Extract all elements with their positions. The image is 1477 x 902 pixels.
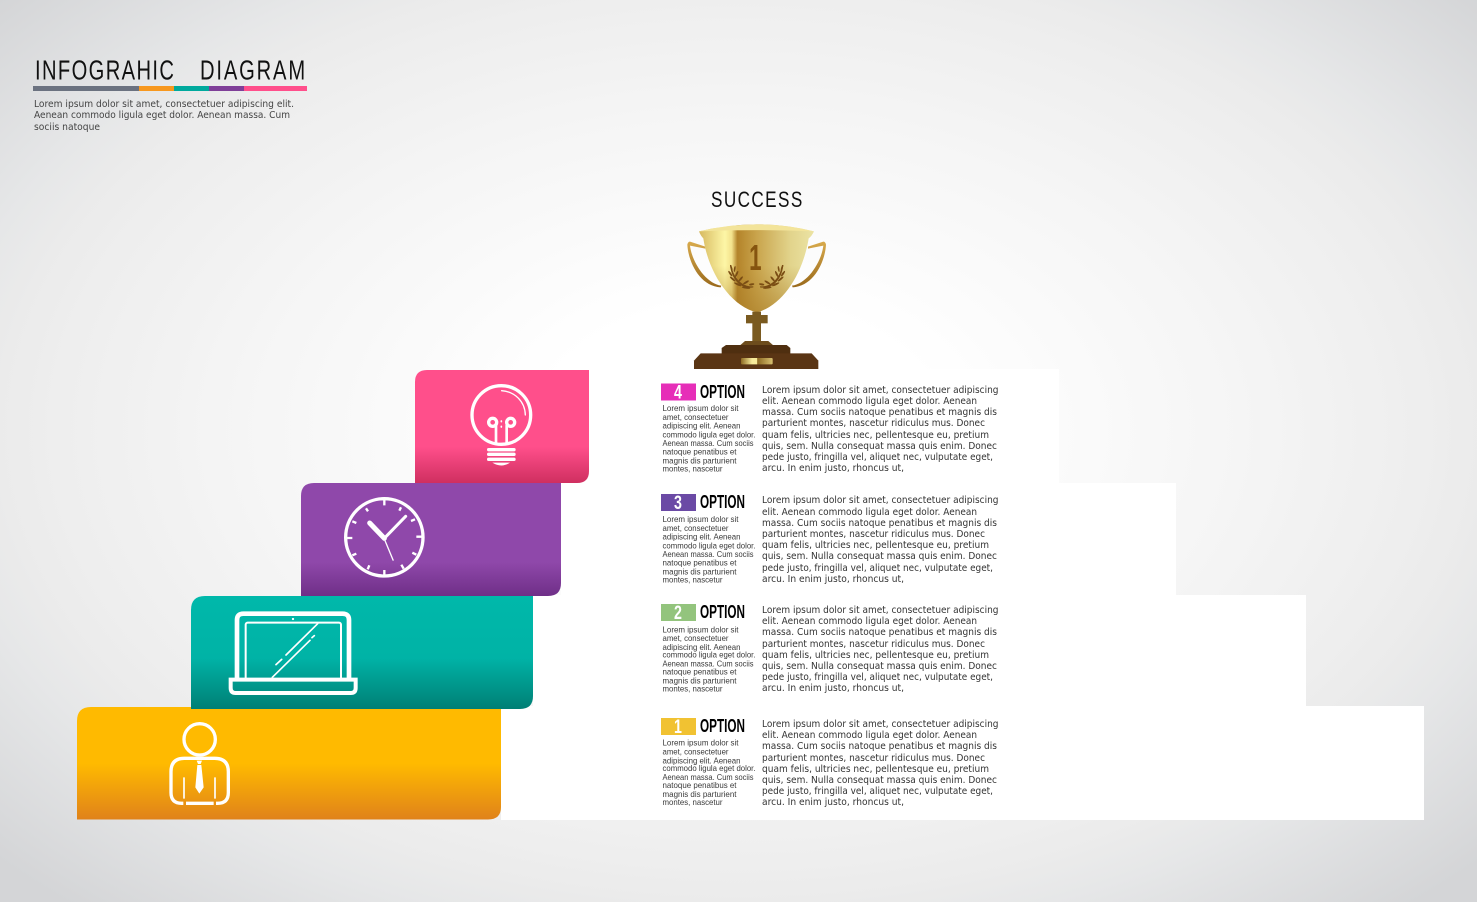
option 4 label: OPTION bbox=[700, 381, 745, 402]
option 1 short text: montes, nascetur bbox=[662, 797, 723, 807]
option 1 short text: natoque penatibus et bbox=[662, 780, 737, 790]
option 4 short text: montes, nascetur bbox=[662, 464, 723, 474]
option 3 short text bbox=[662, 514, 756, 584]
option 1 long text: arcu. In enim justo, rhoncus ut, bbox=[762, 797, 904, 808]
option 3 short text: Lorem ipsum dolor sit bbox=[662, 514, 739, 524]
title bbox=[35, 55, 305, 86]
icon: laptop bbox=[231, 614, 356, 693]
option 3 long text: massa. Cum sociis natoque penatibus et magnis dis bbox=[762, 518, 997, 529]
option 4 long text: quam felis, ultricies nec, pellentesque eu, pretium bbox=[762, 430, 989, 441]
option 4 short text: Lorem ipsum dolor sit bbox=[662, 403, 739, 413]
option 4 long text: elit. Aenean commodo ligula eget dolor. Aenean bbox=[762, 396, 977, 407]
option 3 long text: elit. Aenean commodo ligula eget dolor. Aenean bbox=[762, 507, 977, 518]
option 4 long text: quis, sem. Nulla consequat massa quis enim. Donec bbox=[762, 441, 997, 452]
option 3 short text: montes, nascetur bbox=[662, 574, 723, 584]
option 4 long text bbox=[762, 385, 998, 474]
option 4 short text: magnis dis parturient bbox=[662, 456, 737, 466]
option 2 long text: massa. Cum sociis natoque penatibus et magnis dis bbox=[762, 627, 997, 638]
option 2 long text: parturient montes, nascetur ridiculus mus. Donec bbox=[762, 639, 985, 650]
option 1 long text: massa. Cum sociis natoque penatibus et magnis dis bbox=[762, 741, 997, 752]
option 4 short text: natoque penatibus et bbox=[662, 446, 737, 456]
icon: gold trophy: 1 bbox=[749, 239, 762, 278]
icon: light bulb bbox=[472, 386, 531, 465]
title: DIAGRAM bbox=[200, 55, 305, 86]
option 2 short text: adipiscing elit. Aenean bbox=[662, 642, 741, 652]
option 2 short text bbox=[662, 624, 756, 694]
option 2 long text: Lorem ipsum dolor sit amet, consectetuer adipiscing bbox=[762, 605, 998, 616]
option 2 long text: pede justo, fringilla vel, aliquet nec, vulputate eget, bbox=[762, 672, 993, 683]
option 1 short text: magnis dis parturient bbox=[662, 789, 737, 799]
intro text: Aenean commodo ligula eget dolor. Aenean massa. Cum bbox=[34, 110, 290, 121]
option 1 label bbox=[661, 715, 745, 738]
option 3 short text: commodo ligula eget dolor. bbox=[662, 540, 756, 550]
option 4 short text: amet, consectetuer bbox=[662, 412, 729, 422]
heading: success: SUCCESS bbox=[711, 188, 802, 213]
panel: yellow step 1 bbox=[77, 707, 501, 820]
option 1 short text bbox=[662, 738, 756, 807]
option 4 long text: parturient montes, nascetur ridiculus mus. Donec bbox=[762, 418, 985, 429]
option 2 short text: natoque penatibus et bbox=[662, 666, 737, 676]
option 1 short text: Lorem ipsum dolor sit bbox=[662, 738, 739, 748]
option 1 label: 1 bbox=[674, 716, 682, 738]
option 1 long text: quis, sem. Nulla consequat massa quis enim. Donec bbox=[762, 775, 997, 786]
option 3 long text: parturient montes, nascetur ridiculus mus. Donec bbox=[762, 529, 985, 540]
icon: gold trophy bbox=[687, 224, 826, 370]
option 1 long text: quam felis, ultricies nec, pellentesque eu, pretium bbox=[762, 764, 989, 775]
intro text: sociis natoque bbox=[34, 122, 100, 133]
option 2 label bbox=[661, 601, 745, 624]
option 4 short text: commodo ligula eget dolor. bbox=[662, 430, 756, 440]
option 3 label: OPTION bbox=[700, 491, 745, 512]
multicolour title bar bbox=[33, 86, 307, 91]
option 1 short text: amet, consectetuer bbox=[662, 746, 729, 756]
option 2 short text: magnis dis parturient bbox=[662, 676, 737, 686]
option 2 long text: arcu. In enim justo, rhoncus ut, bbox=[762, 683, 904, 694]
option 1 long text: parturient montes, nascetur ridiculus mus. Donec bbox=[762, 753, 985, 764]
option 2 long text: quam felis, ultricies nec, pellentesque eu, pretium bbox=[762, 650, 989, 661]
intro text: Lorem ipsum dolor sit amet, consectetuer adipiscing elit. bbox=[34, 99, 294, 110]
panel: white stair background bbox=[501, 369, 1424, 820]
icon: businessman bbox=[171, 724, 228, 803]
panel: purple step 3 bbox=[301, 483, 561, 596]
option 3 long text bbox=[762, 495, 998, 585]
option 3 short text: adipiscing elit. Aenean bbox=[662, 532, 741, 542]
option 4 long text: arcu. In enim justo, rhoncus ut, bbox=[762, 463, 904, 474]
icon: clock bbox=[346, 499, 423, 576]
option 1 short text: commodo ligula eget dolor. bbox=[662, 763, 756, 773]
option 1 long text: elit. Aenean commodo ligula eget dolor. Aenean bbox=[762, 730, 977, 741]
option 3 short text: natoque penatibus et bbox=[662, 558, 737, 568]
option 2 short text: commodo ligula eget dolor. bbox=[662, 650, 756, 660]
option 4 label bbox=[661, 381, 745, 403]
option 2 label: OPTION bbox=[700, 601, 745, 622]
option 2 short text: amet, consectetuer bbox=[662, 633, 729, 643]
option 3 long text: Lorem ipsum dolor sit amet, consectetuer adipiscing bbox=[762, 495, 998, 506]
option 4 short text: adipiscing elit. Aenean bbox=[662, 420, 741, 430]
option 1 label: OPTION bbox=[700, 715, 745, 736]
option 3 short text: Aenean massa. Cum sociis bbox=[662, 549, 754, 559]
option 4 long text: Lorem ipsum dolor sit amet, consectetuer adipiscing bbox=[762, 385, 998, 396]
title: INFOGRAHIC bbox=[35, 55, 174, 86]
option 2 label: 2 bbox=[674, 602, 682, 624]
option 1 short text: Aenean massa. Cum sociis bbox=[662, 772, 754, 782]
option 4 long text: massa. Cum sociis natoque penatibus et magnis dis bbox=[762, 407, 997, 418]
panel: teal step 2 bbox=[191, 596, 533, 709]
option 2 short text: Lorem ipsum dolor sit bbox=[662, 624, 739, 634]
option 4 label: 4 bbox=[674, 382, 683, 403]
option 1 long text: Lorem ipsum dolor sit amet, consectetuer adipiscing bbox=[762, 719, 998, 730]
option 3 label bbox=[661, 491, 745, 514]
option 3 long text: quis, sem. Nulla consequat massa quis enim. Donec bbox=[762, 551, 997, 562]
option 2 short text: montes, nascetur bbox=[662, 684, 723, 694]
option 3 long text: quam felis, ultricies nec, pellentesque eu, pretium bbox=[762, 540, 989, 551]
option 4 short text bbox=[662, 403, 756, 474]
option 1 long text bbox=[762, 719, 998, 808]
option 3 short text: magnis dis parturient bbox=[662, 566, 737, 576]
option 4 long text: pede justo, fringilla vel, aliquet nec, vulputate eget, bbox=[762, 452, 993, 463]
option 4 short text: Aenean massa. Cum sociis bbox=[662, 438, 754, 448]
option 1 short text: adipiscing elit. Aenean bbox=[662, 756, 741, 766]
option 2 long text: elit. Aenean commodo ligula eget dolor. Aenean bbox=[762, 616, 977, 627]
option 3 label: 3 bbox=[674, 492, 682, 514]
option 3 short text: amet, consectetuer bbox=[662, 523, 729, 533]
option 1 long text: pede justo, fringilla vel, aliquet nec, vulputate eget, bbox=[762, 786, 993, 797]
option 3 long text: pede justo, fringilla vel, aliquet nec, vulputate eget, bbox=[762, 563, 993, 574]
intro text bbox=[34, 99, 294, 133]
panel: pink step 4 bbox=[415, 370, 589, 483]
option 2 long text: quis, sem. Nulla consequat massa quis enim. Donec bbox=[762, 661, 997, 672]
option 2 short text: Aenean massa. Cum sociis bbox=[662, 658, 754, 668]
option 3 long text: arcu. In enim justo, rhoncus ut, bbox=[762, 574, 904, 585]
option 2 long text bbox=[762, 605, 998, 694]
